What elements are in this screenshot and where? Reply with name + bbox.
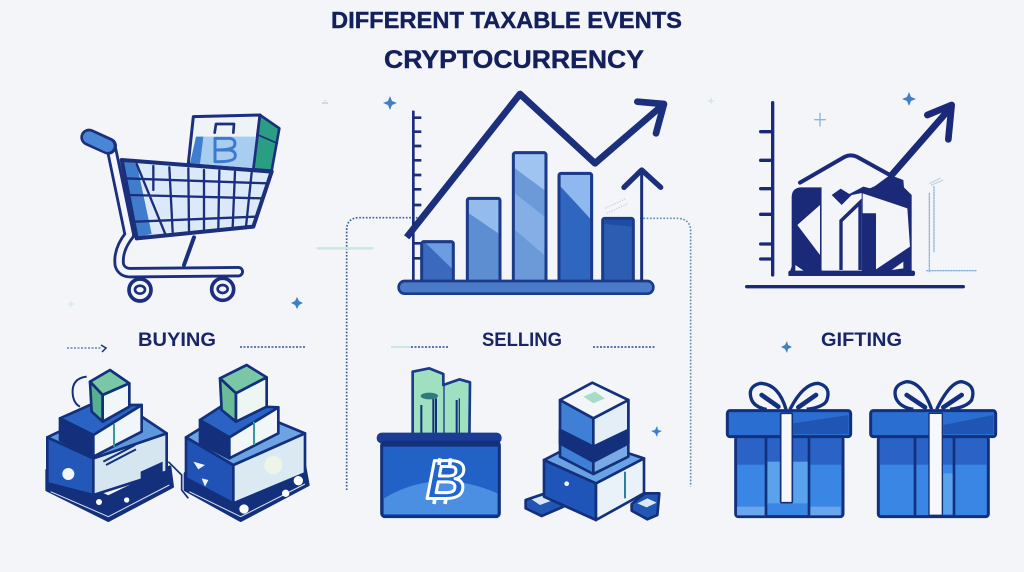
icon: bitcoin wallet with cash [377, 368, 502, 517]
icon: bar chart with rising arrow [317, 94, 691, 490]
icon: shopping cart with crypto box [89, 115, 279, 301]
icon: gift box two [871, 382, 996, 517]
icon: left stacked machine [47, 370, 188, 521]
sparkles [67, 92, 916, 437]
icon: house chart with arrow [747, 103, 977, 287]
heading: buying: BUYING [138, 329, 216, 351]
icon: right stacked machine [185, 365, 308, 521]
icon: bitcoin wallet with cash: B [426, 449, 466, 511]
title [331, 7, 682, 74]
icon: gift box one [727, 383, 851, 517]
heading: buying [67, 329, 305, 352]
icon: isometric crypto cube stack [526, 383, 659, 520]
title: CRYPTOCURRENCY [384, 46, 644, 74]
title: DIFFERENT TAXABLE EVENTS [331, 7, 682, 33]
heading: gifting: GIFTING [821, 329, 902, 351]
heading: selling: SELLING [482, 329, 562, 351]
